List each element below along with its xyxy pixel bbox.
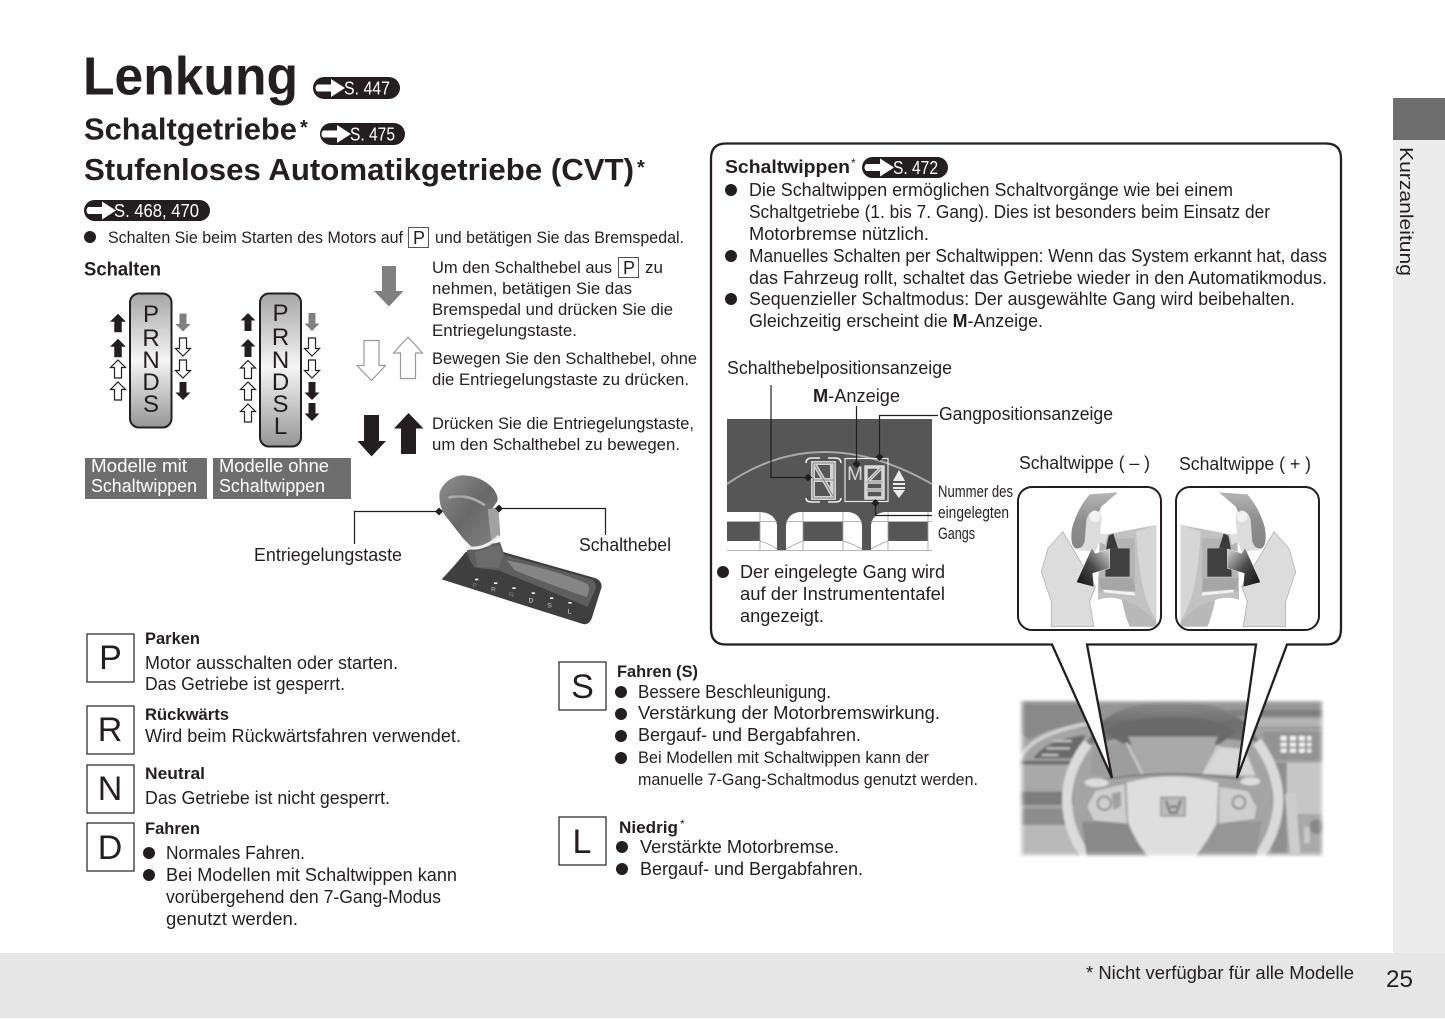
gear S: Fahren (S): Bessere Beschleunigung. xyxy=(638,682,831,702)
heading: Schaltgetriebe: Schaltgetriebe xyxy=(84,112,297,146)
hub xyxy=(1127,776,1218,857)
label: models without paddles xyxy=(213,456,351,499)
note on displayed gear: Der eingelegte Gang wird xyxy=(740,562,945,582)
right screen xyxy=(1287,763,1323,814)
label: gear number: Nummer des xyxy=(938,483,1013,501)
spokes xyxy=(1124,742,1127,745)
gear number segments xyxy=(866,467,883,498)
bullet list: Schaltgetriebe (1. bis 7. Gang). Dies ist besonders beim Einsatz der xyxy=(749,202,1270,222)
label: models with paddles xyxy=(85,456,207,499)
lever gate body xyxy=(260,294,301,446)
right control xyxy=(1218,786,1257,824)
gate letters: R xyxy=(272,324,289,351)
heading: CVT: Stufenloses Automatikgetriebe (CVT) xyxy=(84,152,634,187)
gate markings: N xyxy=(509,592,514,599)
label: models without paddles: Modelle ohne xyxy=(219,456,329,476)
gear P: Parken: P xyxy=(99,639,122,677)
feathered photo edge xyxy=(1020,699,1324,857)
gate letters: N xyxy=(142,347,160,374)
illustration: right hand on plus paddle xyxy=(1176,487,1319,630)
title: Lenkung xyxy=(83,46,298,106)
gear P: Parken: Parken xyxy=(145,629,200,648)
gate letters: S xyxy=(272,391,289,418)
bullet list: das Fahrzeug rollt, schaltet das Getriebe wieder in den Automatikmodus. xyxy=(749,268,1327,288)
illustration: gear shift lever xyxy=(439,475,602,624)
arrows down right xyxy=(176,314,190,400)
page reference: S. 468, 470 xyxy=(84,200,210,221)
gear box outline xyxy=(845,458,888,502)
right vent xyxy=(1263,732,1323,760)
intro bullet text xyxy=(84,228,684,248)
M indicator: M xyxy=(847,464,863,485)
lever gate body xyxy=(130,294,172,428)
gear N: Neutral: Neutral xyxy=(145,764,205,783)
gate letters: S xyxy=(143,391,159,418)
bullet list: Manuelles Schalten per Schaltwippen: Wenn das System erkannt hat, dass xyxy=(749,246,1327,266)
tachometer arc xyxy=(727,452,932,484)
gate markings: D xyxy=(529,598,534,605)
left control xyxy=(1087,783,1127,824)
page reference: S. 472: S. 472 xyxy=(893,158,938,178)
legend text: gray arrow: nehmen, betätigen Sie das xyxy=(432,279,632,298)
label: release button xyxy=(254,508,443,565)
label: M indicator: M-Anzeige xyxy=(813,386,900,406)
label: models with paddles: Schaltwippen xyxy=(91,476,197,496)
heading: Schalten: Schalten xyxy=(84,260,161,280)
gear gate: models without paddles xyxy=(240,294,320,446)
gear S: Fahren (S): Fahren (S) xyxy=(617,662,698,681)
console base xyxy=(442,552,602,624)
gear P: Parken xyxy=(87,629,398,694)
gate markings: S xyxy=(547,603,552,610)
gear R: Rückwärts: Wird beim Rückwärtsfahren verwendet. xyxy=(145,726,461,746)
legend text: gray arrow: Bremspedal und drücken Sie die xyxy=(432,300,673,319)
label: gear position display: Gangpositionsanzeige xyxy=(939,404,1113,424)
lower spoke areas xyxy=(1082,822,1147,857)
gate markings: L xyxy=(568,608,572,615)
sidebar label: Kurzanleitung xyxy=(1396,147,1416,276)
label: release button: Entriegelungstaste xyxy=(254,545,402,565)
bullet list xyxy=(725,180,1327,331)
gear N: Neutral xyxy=(87,764,390,813)
gate letters: D xyxy=(142,369,160,396)
gear D: Fahren: Bei Modellen mit Schaltwippen kann xyxy=(166,865,457,885)
arrows down right xyxy=(304,313,320,421)
gear D: Fahren: genutzt werden. xyxy=(166,909,298,929)
callout panel: shift paddles xyxy=(711,144,1341,778)
footnote: * Nicht verfügbar für alle Modelle xyxy=(1086,963,1354,983)
heading: Schaltgetriebe: * xyxy=(300,117,308,139)
leader: lever position xyxy=(771,385,812,482)
page reference: S. 475 xyxy=(320,123,405,145)
intro bullet text: Schalten Sie beim Starten des Motors auf xyxy=(108,229,403,247)
gate letters: L xyxy=(274,413,287,440)
gear gate: models with paddles xyxy=(110,294,190,428)
gear D: Fahren: D xyxy=(98,829,122,867)
wheel upper rim and cluster opening xyxy=(1087,702,1258,745)
left dash trim xyxy=(1020,723,1090,758)
gear D: Fahren: vorübergehend den 7-Gang-Modus xyxy=(166,887,441,907)
boot xyxy=(467,542,596,607)
legend arrow: gray down xyxy=(374,266,404,306)
gate letters: P xyxy=(272,300,289,327)
label: models with paddles: Modelle mit xyxy=(91,456,187,476)
note on displayed gear: auf der Instrumententafel xyxy=(740,584,945,604)
gear P: Parken: Das Getriebe ist gesperrt. xyxy=(145,674,345,694)
bullet list: Gleichzeitig erscheint die M-Anzeige. xyxy=(749,311,1043,331)
panel heading: Schaltwippen xyxy=(725,156,850,177)
legend arrows: black xyxy=(358,413,424,456)
gate letters xyxy=(142,301,160,418)
legend text: gray arrow: Um den Schalthebel aus xyxy=(432,258,612,277)
wheel white rim left and right xyxy=(1067,743,1088,857)
gear R: Rückwärts xyxy=(87,705,461,754)
legend arrows: white xyxy=(357,337,422,380)
gear L: Niedrig: Verstärkte Motorbremse. xyxy=(640,837,839,857)
label: lever position display: Schalthebelpositionsanzeige xyxy=(727,358,952,378)
legend text: black arrows: um den Schalthebel zu bewegen. xyxy=(432,435,680,454)
gate letters: P xyxy=(143,301,159,328)
gear S: Fahren (S): Verstärkung der Motorbremswirkung. xyxy=(638,703,940,723)
gear D: Fahren: Fahren xyxy=(145,819,200,838)
page reference: S. 472 xyxy=(862,157,948,178)
legend text: white arrows: die Entriegelungstaste zu drücken. xyxy=(432,370,689,389)
gate letters xyxy=(272,300,289,440)
label: gear number xyxy=(938,483,1013,543)
shift up/down marker xyxy=(893,470,905,498)
gear N: Neutral: N xyxy=(98,770,122,808)
bullet list: Motorbremse nützlich. xyxy=(749,224,929,244)
gear S: Fahren (S): manuelle 7-Gang-Schaltmodus genutzt werden. xyxy=(638,771,978,789)
legend text: white arrows xyxy=(432,349,697,389)
bullet list: Die Schaltwippen ermöglichen Schaltvorgänge wie bei einem xyxy=(749,180,1233,200)
gate markings xyxy=(472,579,572,615)
gate letters: D xyxy=(272,369,289,396)
callout outline with pointers xyxy=(711,144,1341,778)
dashboard background xyxy=(1019,727,1324,858)
label: shift lever xyxy=(495,504,671,555)
arrows up left xyxy=(240,313,256,422)
legend text: gray arrow xyxy=(432,258,673,340)
page reference: S. 475: S. 475 xyxy=(350,124,395,144)
label: paddle minus: Schaltwippe ( – ) xyxy=(1019,453,1150,473)
label: gear number: Gangs xyxy=(938,525,975,543)
intro bullet text: und betätigen Sie das Bremspedal. xyxy=(435,229,684,247)
gauge thin lines xyxy=(727,512,932,550)
note on displayed gear: angezeigt. xyxy=(740,606,824,626)
gear L: Niedrig xyxy=(559,817,863,879)
illustration: left hand on minus paddle xyxy=(1018,487,1161,630)
arrows up left xyxy=(110,314,126,400)
gear D: Fahren xyxy=(87,819,457,929)
page reference: S. 468, 470: S. 468, 470 xyxy=(114,201,199,221)
selected gear segment display xyxy=(806,458,841,502)
gear R: Rückwärts: R xyxy=(98,711,122,749)
gate letters: N xyxy=(272,347,289,374)
gear S: Fahren (S): S xyxy=(571,668,594,706)
gear P: Parken: Motor ausschalten oder starten. xyxy=(145,653,398,673)
gear S: Fahren (S) xyxy=(559,662,978,789)
gate markings: P xyxy=(472,583,477,590)
leader: M indicator xyxy=(852,406,860,468)
label: gear number: eingelegten xyxy=(938,504,1009,522)
gauge dark blocks xyxy=(727,522,928,541)
emblem xyxy=(1161,797,1185,816)
gear L: Niedrig: L xyxy=(573,823,591,861)
instrument display xyxy=(727,419,932,550)
legend text: gray arrow: zu xyxy=(645,258,663,277)
label: paddle plus: Schaltwippe ( + ) xyxy=(1179,454,1311,474)
gate markings: R xyxy=(491,586,496,593)
white ring xyxy=(466,536,499,548)
illustration: steering wheel photo xyxy=(1020,699,1324,857)
page reference: S. 447: S. 447 xyxy=(344,78,390,98)
right sidebar strip xyxy=(1393,140,1445,953)
gauge pattern xyxy=(727,512,932,550)
legend text: black arrows: Drücken Sie die Entriegelungstaste, xyxy=(432,414,694,433)
note on displayed gear xyxy=(717,562,945,626)
gear R: Rückwärts: Rückwärts xyxy=(145,705,229,724)
gear L: Niedrig: * xyxy=(680,817,685,831)
gear N: Neutral: Das Getriebe ist nicht gesperrt. xyxy=(145,788,390,808)
page number: 25 xyxy=(1386,966,1413,993)
legend text: black arrows xyxy=(432,414,694,454)
bullet list: Sequenzieller Schaltmodus: Der ausgewählte Gang wird beibehalten. xyxy=(749,289,1295,309)
legend text: gray arrow: P xyxy=(623,258,635,278)
gear S: Fahren (S): Bergauf- und Bergabfahren. xyxy=(638,725,861,745)
panel heading: * xyxy=(851,156,856,170)
gear L: Niedrig: Niedrig xyxy=(619,818,678,837)
legend text: white arrows: Bewegen Sie den Schalthebel, ohne xyxy=(432,349,697,368)
page reference: S. 447 xyxy=(313,77,400,99)
intro bullet text: P xyxy=(413,228,425,248)
label: models without paddles: Schaltwippen xyxy=(219,476,325,496)
leader: gear number xyxy=(872,499,932,516)
gear D: Fahren: Normales Fahren. xyxy=(166,843,305,863)
legend text: gray arrow: Entriegelungstaste. xyxy=(432,321,577,340)
sidebar dark tab xyxy=(1393,98,1445,140)
gear L: Niedrig: Bergauf- und Bergabfahren. xyxy=(640,859,863,879)
gear S: Fahren (S): Bei Modellen mit Schaltwippen kann der xyxy=(638,749,929,767)
knob xyxy=(439,475,500,547)
gate letters: R xyxy=(142,325,160,352)
label: shift lever: Schalthebel xyxy=(579,535,671,555)
heading: CVT: * xyxy=(637,157,645,179)
leader: gear position xyxy=(876,416,938,461)
footer band xyxy=(0,953,1445,1018)
paddle tips xyxy=(1085,778,1109,787)
